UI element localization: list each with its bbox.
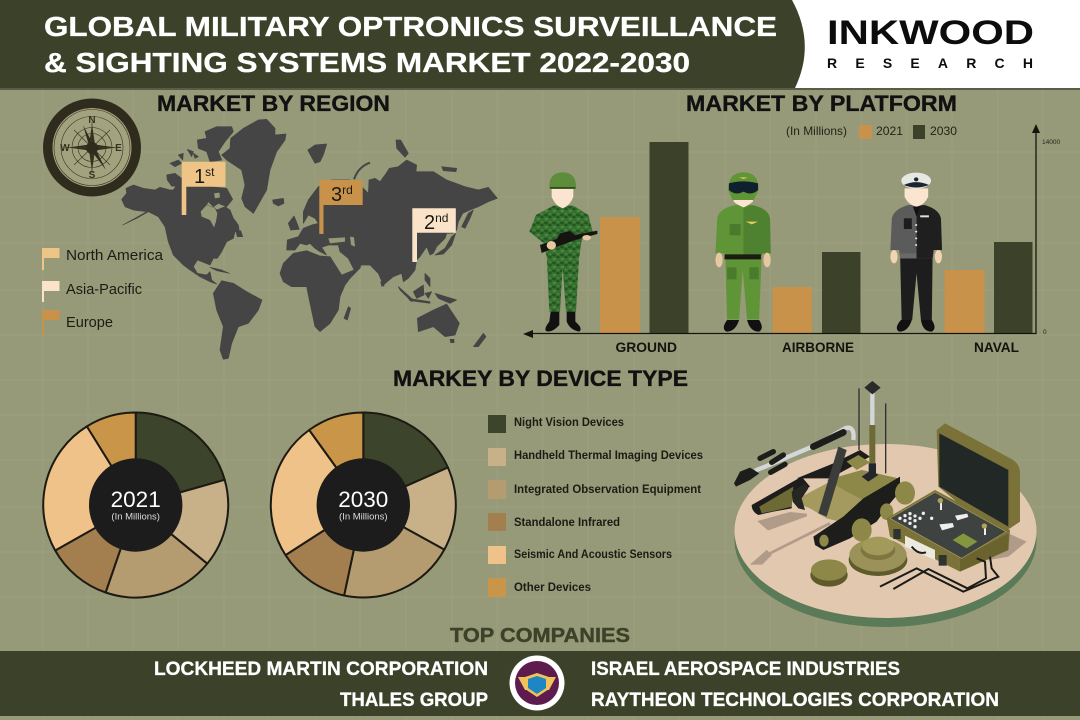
bars: naval <box>944 242 1032 333</box>
control case <box>880 423 1027 592</box>
compass: E <box>115 143 122 154</box>
bar chart: market by platform <box>523 124 1060 355</box>
flag: 3rd Europe: rd <box>342 183 353 197</box>
icon: shield emblem <box>510 656 564 710</box>
device type legend: Seismic And Acoustic Sensors <box>514 549 672 561</box>
donut chart: 2021: (In Millions) <box>111 512 160 522</box>
mines <box>810 537 907 587</box>
logo: Inkwood Research: INKWOOD <box>827 14 1034 52</box>
flag: 2nd Asia-Pacific: 2 <box>424 212 435 234</box>
title <box>44 11 777 78</box>
robot <box>734 381 915 563</box>
donut chart: 2021 <box>43 412 228 598</box>
logo: Inkwood Research: RESEARCH <box>827 55 1033 71</box>
legend: Asia-Pacific: Asia-Pacific <box>66 281 142 298</box>
footer banner: companies: RAYTHEON TECHNOLOGIES CORPORATION <box>591 690 999 711</box>
category labels: GROUND <box>616 339 677 355</box>
flag: 1st North America <box>182 162 226 215</box>
region legend <box>42 247 164 335</box>
legend: (In Millions) <box>786 124 847 138</box>
category labels: NAVAL <box>974 339 1019 355</box>
heading: market by platform: MARKET BY PLATFORM <box>686 91 957 116</box>
heading: market by region: MARKET BY REGION <box>157 91 390 116</box>
illustration: robot and control case on platform <box>734 381 1036 627</box>
logo: Inkwood Research <box>827 14 1034 71</box>
legend: Europe: Europe <box>66 314 113 331</box>
flag: 3rd Europe <box>319 180 363 234</box>
device type legend: Other Devices <box>514 582 591 594</box>
footer banner: companies: THALES GROUP <box>340 690 488 711</box>
category labels: AIRBORNE <box>782 339 854 355</box>
flag: 2nd Asia-Pacific: nd <box>435 211 448 225</box>
compass: N <box>88 115 96 126</box>
footer banner: companies: LOCKHEED MARTIN CORPORATION <box>154 659 488 680</box>
category labels <box>616 339 1019 355</box>
bars: airborne <box>772 252 860 333</box>
heading: top companies: TOP COMPANIES <box>450 625 630 647</box>
flag: 1st North America: st <box>205 165 215 179</box>
device type legend: Integrated Observation Equipment <box>514 484 701 496</box>
compass: S <box>89 170 96 181</box>
footer banner: companies: ISRAEL AEROSPACE INDUSTRIES <box>591 659 900 680</box>
axes: 14000 <box>1042 139 1060 146</box>
compass <box>43 98 141 196</box>
flag: 1st North America: 1 <box>194 166 205 188</box>
title: & SIGHTING SYSTEMS MARKET 2022-2030 <box>44 47 690 78</box>
footer banner: companies <box>0 651 1080 716</box>
device type legend: Standalone Infrared <box>514 517 620 529</box>
legend: 2030 <box>930 124 957 138</box>
compass: W <box>60 143 70 154</box>
device type legend <box>488 415 703 597</box>
donut chart: 2030: (In Millions) <box>339 512 388 522</box>
world map <box>122 119 497 359</box>
axes: 0 <box>1043 329 1047 336</box>
legend <box>786 124 957 139</box>
heading: market by device type: MARKEY BY DEVICE TYPE <box>393 366 688 391</box>
icon: pilot <box>715 172 771 332</box>
donut chart: 2030: 2030 <box>338 487 388 512</box>
legend: 2021 <box>876 124 903 138</box>
platform disc <box>734 444 1036 627</box>
bars: ground <box>600 142 688 333</box>
legend: North America: North America <box>66 247 164 264</box>
icon: naval officer <box>890 173 942 332</box>
device type legend: Handheld Thermal Imaging Devices <box>514 450 703 462</box>
axes <box>523 124 1060 338</box>
title: GLOBAL MILITARY OPTRONICS SURVEILLANCE <box>44 11 777 42</box>
header banner <box>0 0 1080 90</box>
flag: 3rd Europe: 3 <box>331 184 342 206</box>
icon: soldier <box>529 172 597 332</box>
flag: 2nd Asia-Pacific <box>412 208 456 262</box>
donut chart: 2021: 2021 <box>111 487 161 512</box>
donut chart: 2030 <box>271 412 456 598</box>
device type legend: Night Vision Devices <box>514 417 624 429</box>
